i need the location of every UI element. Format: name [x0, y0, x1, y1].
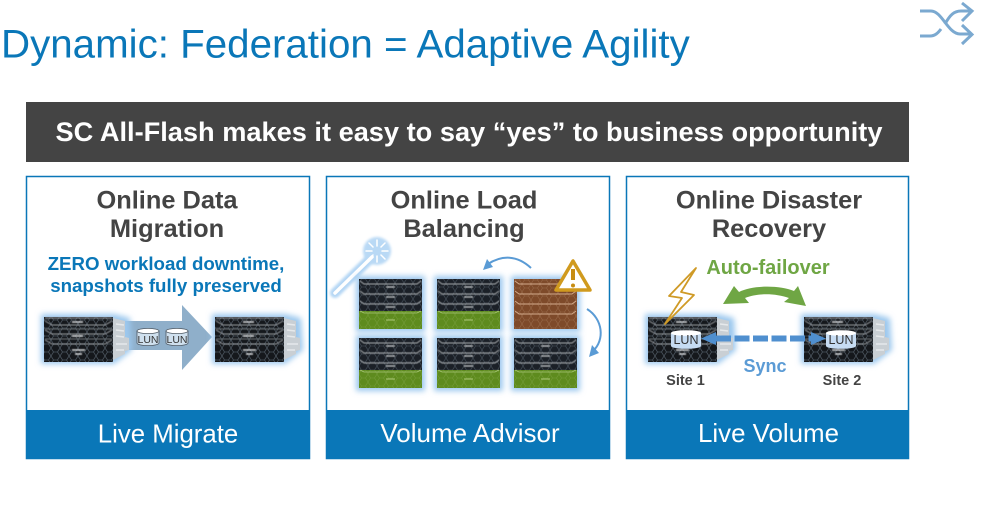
- text: site 1: Site 1: [666, 373, 705, 389]
- icon: warning triangle: [556, 261, 590, 290]
- footer: live migrate: Live Migrate: [98, 420, 238, 448]
- banner: SC All-Flash makes it easy to say “yes” to business opportunity: [56, 116, 882, 147]
- icon: LUN site 1: LUN: [673, 333, 699, 347]
- icon: LUN disk 1: LUN: [137, 334, 159, 346]
- icon: source server: [41, 314, 132, 364]
- panel: online load balancing: [326, 176, 610, 459]
- icon: shuffle arrows: [920, 3, 972, 44]
- server rack grid: [356, 276, 580, 391]
- arrow: curved down: [587, 309, 601, 357]
- text: sync: Sync: [743, 356, 787, 376]
- icon: site 1 server: [645, 314, 736, 364]
- banner: [26, 102, 909, 162]
- heading: online disaster recovery: Online Disaster: [676, 186, 862, 214]
- footer: volume advisor: Volume Advisor: [380, 418, 560, 448]
- arrow: auto-failover: [723, 286, 806, 306]
- text: auto-failover: Auto-failover: [706, 257, 830, 279]
- footer: live volume: Live Volume: [698, 420, 839, 448]
- text: zero workload downtime: ZERO workload downtime,: [48, 253, 284, 274]
- icon: LUN site 2: [826, 330, 856, 349]
- icon: site 2 server: [801, 314, 892, 364]
- footer: live volume: [626, 410, 909, 459]
- icon: lightning bolt: [665, 268, 696, 324]
- overloaded rack: [511, 276, 580, 332]
- footer: volume advisor: [326, 410, 610, 459]
- heading: online disaster recovery: Recovery: [712, 215, 826, 243]
- icon: LUN site 2: LUN: [828, 333, 854, 347]
- icon: target server: [212, 314, 303, 364]
- arrow: sync: [701, 332, 826, 345]
- heading: online data migration: Migration: [110, 215, 224, 243]
- heading: online data migration: Online Data: [96, 186, 238, 214]
- arrow: curved left: [483, 258, 531, 270]
- icon: magic wand: [335, 237, 391, 293]
- panel: online data migration: [26, 176, 310, 459]
- panel: online disaster recovery: [626, 176, 909, 459]
- text: zero workload downtime: snapshots fully preserved: [50, 275, 282, 296]
- icon: LUN disk 2: LUN: [166, 334, 188, 346]
- heading: online load balancing: Balancing: [403, 215, 525, 243]
- icon: LUN disk 2: [166, 328, 188, 346]
- text: site 2: Site 2: [823, 373, 861, 389]
- icon: LUN disk 1: [137, 328, 159, 346]
- title: Dynamic: Federation = Adaptive Agility: [1, 22, 691, 66]
- heading: online load balancing: Online Load: [391, 186, 537, 214]
- footer: live migrate: [26, 410, 310, 459]
- icon: migration arrow: [113, 305, 212, 370]
- icon: LUN site 1: [671, 330, 701, 349]
